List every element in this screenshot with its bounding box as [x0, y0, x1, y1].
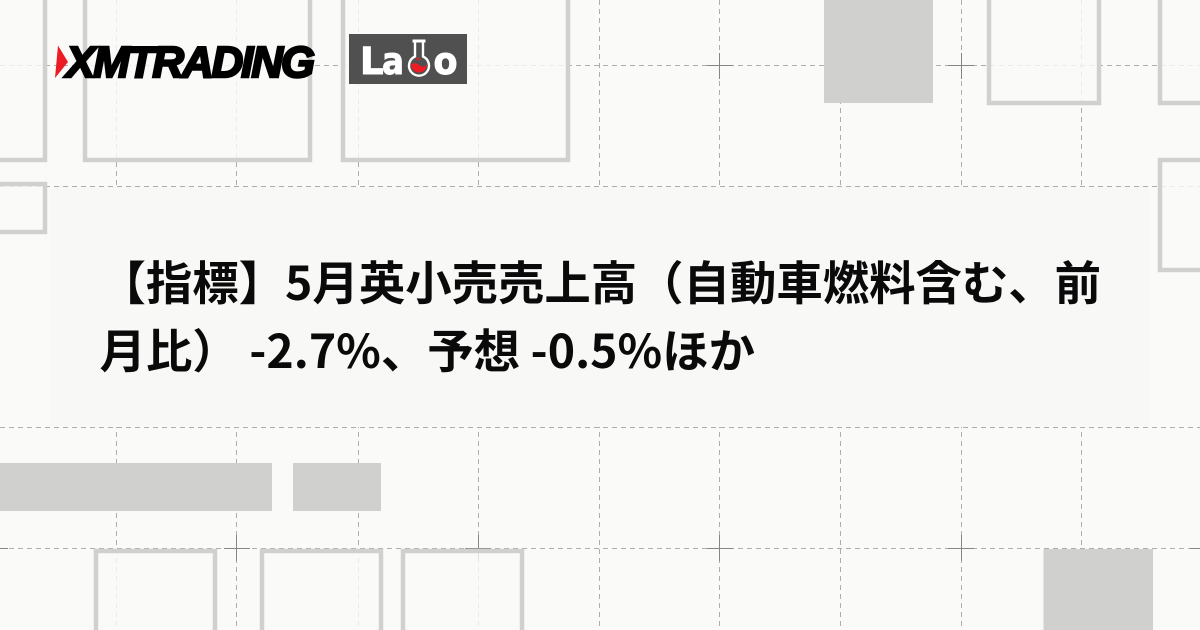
title: 月比） -2.7%、予想 -0.5%ほか [100, 315, 755, 382]
wordmark L a: L [360, 40, 384, 83]
wordmark o: o [434, 40, 458, 83]
title [100, 247, 1101, 382]
logo plate [349, 34, 467, 84]
logo: XMTRADING [55, 42, 316, 82]
icon: red arrowhead [55, 46, 68, 78]
title panel background [50, 187, 1150, 427]
logo: Lab: a [382, 40, 404, 83]
icon: flask [409, 41, 429, 76]
logo: Lab [349, 34, 467, 84]
title: 【指標】5月英小売売上高（自動車燃料含む、前 [100, 247, 1101, 314]
